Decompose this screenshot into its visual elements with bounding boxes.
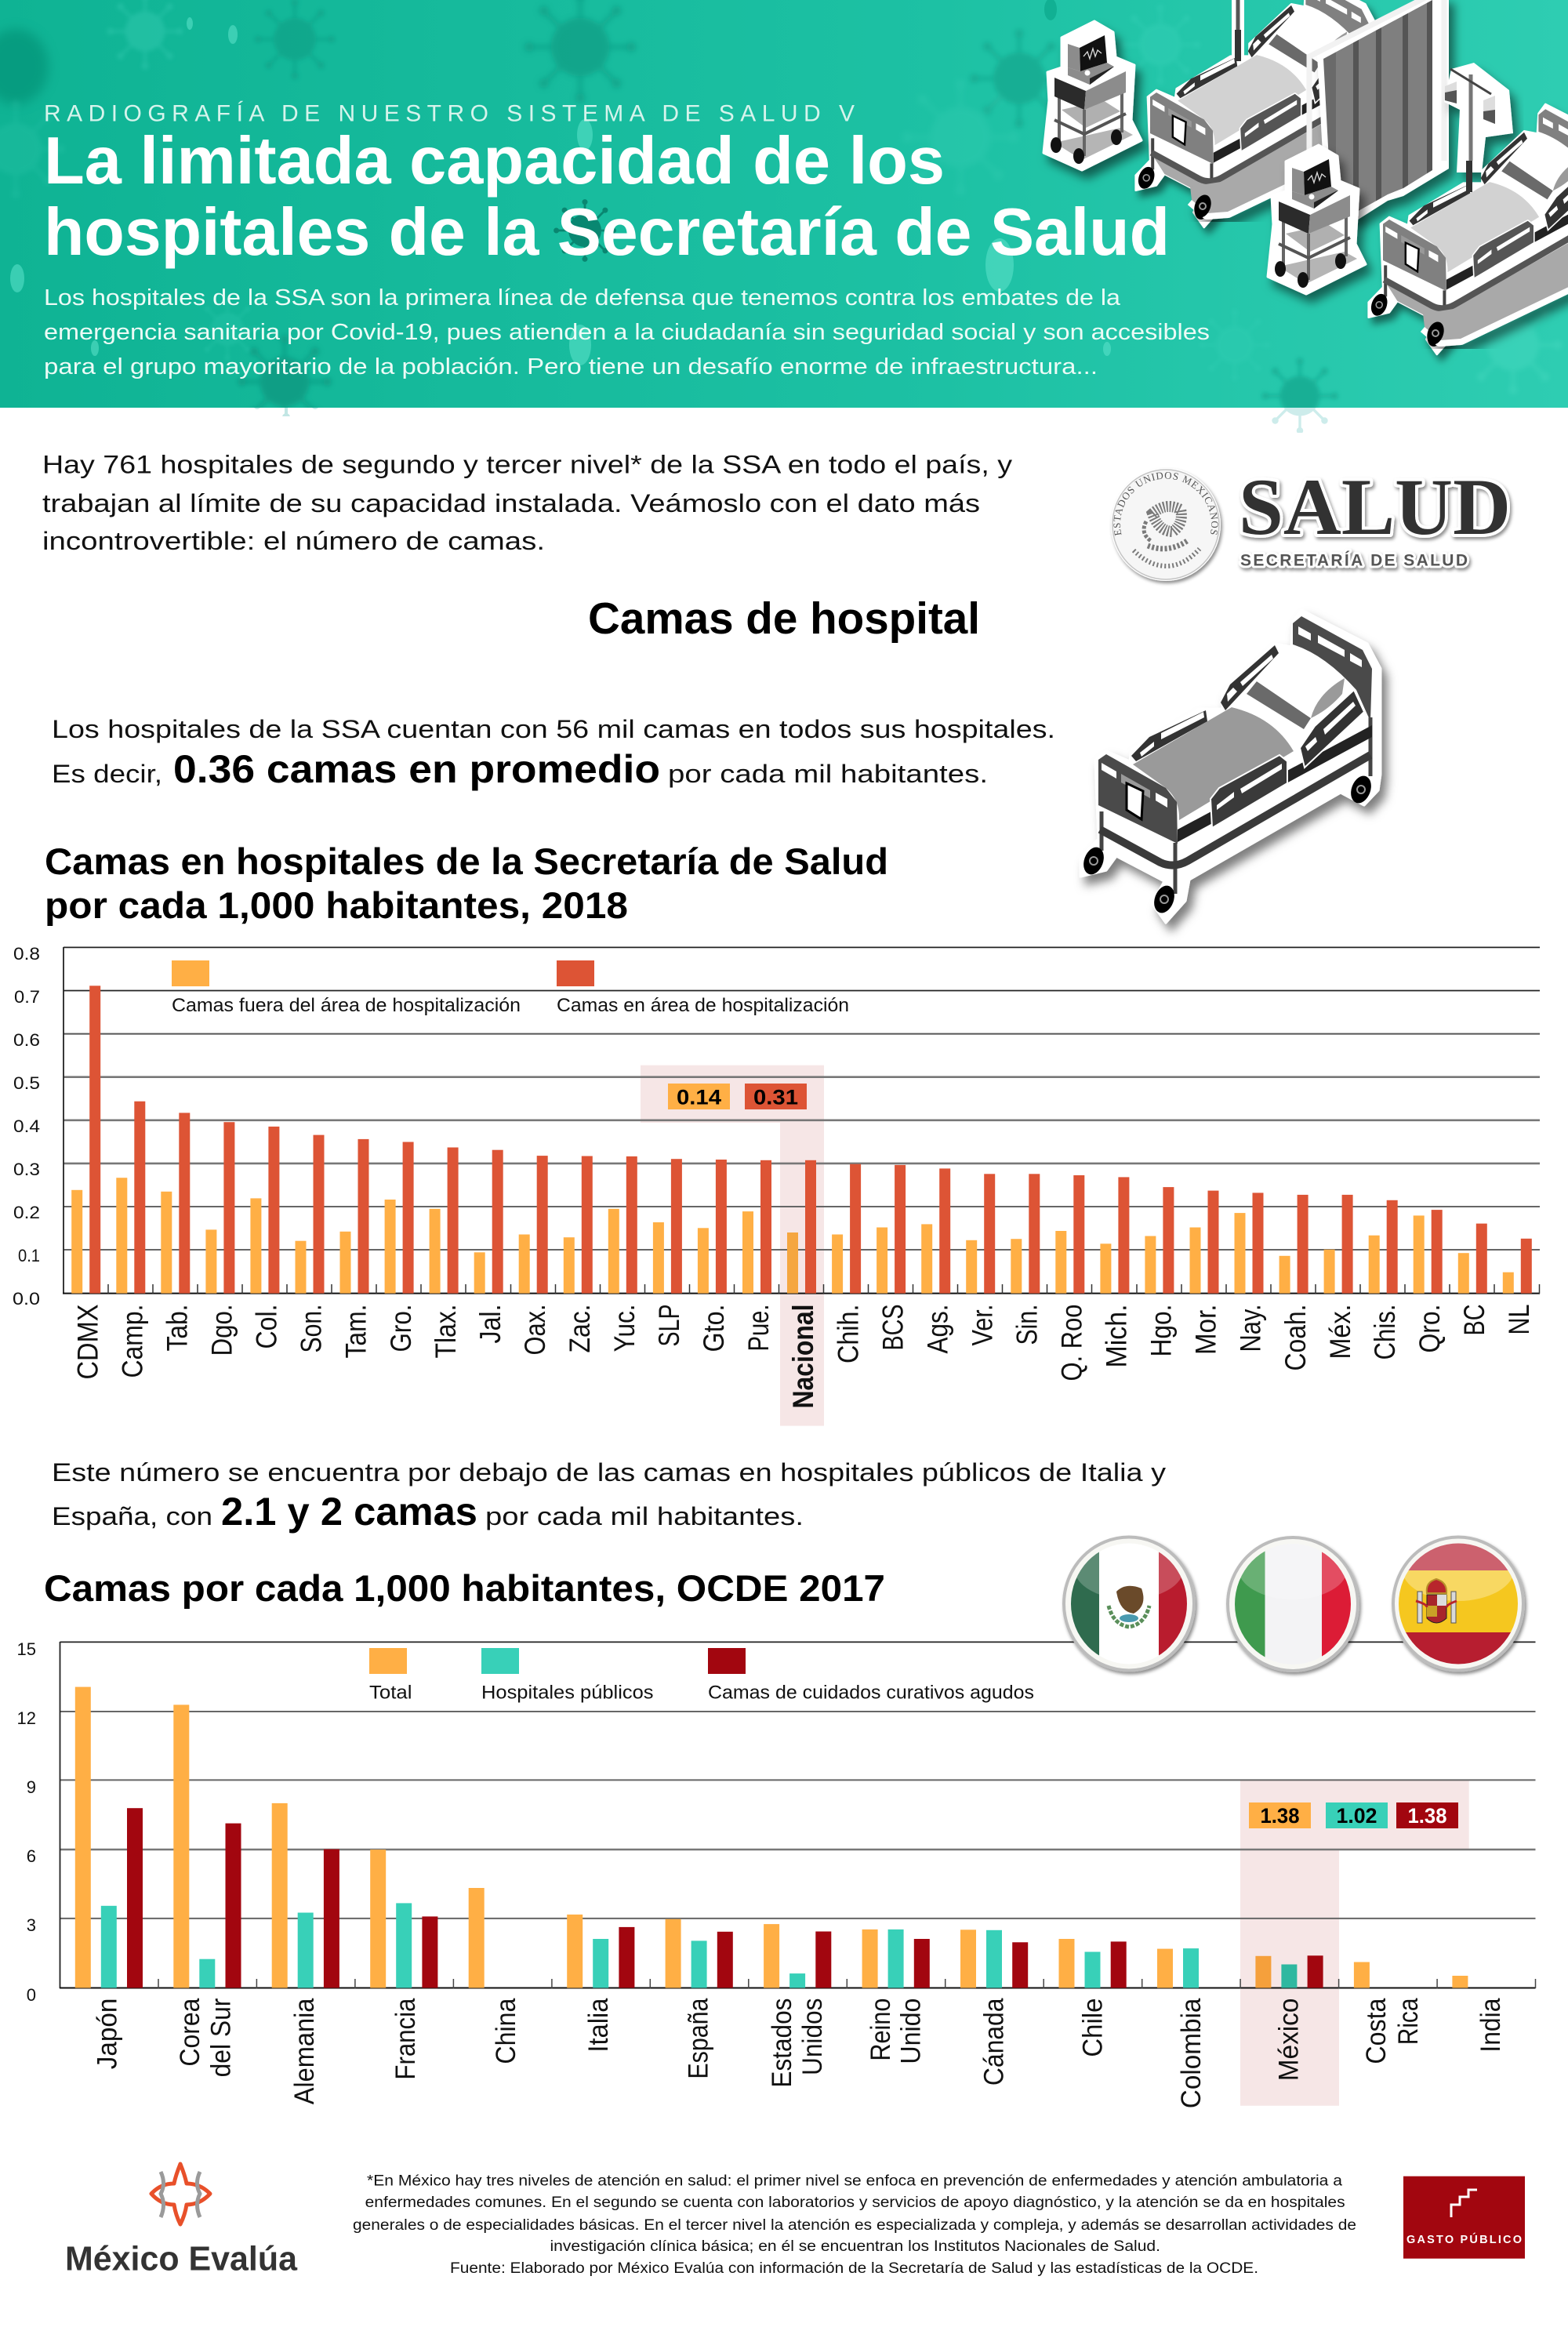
country labels: Corea <box>175 1998 205 2067</box>
Secretaría de Salud wordmark: SECRETARÍA DE SALUD <box>1240 552 1468 569</box>
country labels: Costa <box>1361 1998 1392 2064</box>
state labels: BC <box>1458 1305 1490 1336</box>
bars: camas fuera del área de hospitalización <box>71 1178 1514 1294</box>
chart 2 title: Camas por cada 1,000 habitantes, OCDE 2017 <box>44 1567 885 1609</box>
y axis labels: 0.5 <box>13 1073 40 1093</box>
country labels: Estados <box>767 1998 797 2088</box>
logo wordmark: México Evalúa <box>65 2240 298 2278</box>
icon: hospital bed <box>1080 610 1381 923</box>
y axis labels: 0.2 <box>13 1203 40 1222</box>
national seal: ESTADOS UNIDOS MEXICANOS <box>1113 472 1218 536</box>
state labels: Camp. <box>116 1305 149 1378</box>
first bed <box>1135 0 1376 227</box>
state labels: Tlax. <box>430 1305 462 1358</box>
badges: Nacional values <box>668 1084 807 1109</box>
chart 1 title <box>45 840 888 926</box>
flag: Italia <box>1228 1537 1361 1671</box>
bar chart: OCDE <box>17 1639 1535 2108</box>
legend: Camas fuera del área de hospitalización <box>172 995 521 1016</box>
state labels: Coah. <box>1279 1305 1312 1370</box>
state labels: Méx. <box>1324 1305 1356 1360</box>
flag: España <box>1393 1535 1523 1672</box>
state labels: Col. <box>251 1305 283 1349</box>
badges: Nacional values: 0.14 <box>677 1085 721 1109</box>
logo mark <box>151 2164 210 2224</box>
comparison paragraph: Este número se encuentra por debajo de las camas en hospitales públicos de Italia y <box>52 1458 1166 1487</box>
badges: Nacional values: 0.31 <box>753 1085 798 1109</box>
intro paragraph: incontrovertible: el número de camas. <box>42 527 545 555</box>
state labels: Sin. <box>1011 1305 1043 1345</box>
state labels: Yuc. <box>608 1305 641 1352</box>
y axis labels <box>13 944 40 1309</box>
IV stand with bags <box>1444 63 1513 172</box>
flag: México <box>1064 1537 1198 1670</box>
chart 1 title: Camas en hospitales de la Secretaría de Salud <box>45 840 888 882</box>
bars: camas de cuidados curativos agudos <box>127 1808 1323 1988</box>
state labels: Hgo. <box>1145 1305 1178 1356</box>
state labels: Zac. <box>564 1305 596 1353</box>
country labels: Francia <box>390 1998 421 2080</box>
logo: Secretaría de Salud <box>1110 463 1514 586</box>
state labels: Chis. <box>1369 1305 1401 1360</box>
state labels: Q. Roo <box>1055 1305 1088 1381</box>
header paragraph <box>44 285 1210 379</box>
y axis labels <box>17 1639 36 2005</box>
state labels: CDMX <box>71 1305 103 1380</box>
state labels: Chih. <box>832 1305 864 1363</box>
callout: 56 mil camas: Es decir, <box>52 760 162 788</box>
bars: camas en área de hospitalización <box>89 986 1532 1294</box>
state labels: NL <box>1503 1305 1535 1334</box>
state labels: Qro. <box>1414 1305 1446 1353</box>
country labels: Italia <box>583 1998 614 2053</box>
state labels: Jal. <box>474 1305 506 1344</box>
state labels: Gto. <box>698 1305 730 1352</box>
IV pole behind first bed <box>1232 0 1244 60</box>
y axis labels: 3 <box>27 1915 36 1935</box>
country labels: Unido <box>895 1998 927 2064</box>
bars: hospitales públicos <box>101 1903 1297 1988</box>
state labels: Nay. <box>1235 1305 1267 1352</box>
country labels <box>93 1998 1506 2108</box>
state labels: Son. <box>296 1305 328 1353</box>
state labels: Pue. <box>742 1305 775 1351</box>
monitor cart centre <box>1268 145 1366 294</box>
footnote and source: enfermedades comunes. En el segundo se cuenta con laboratorios y servicios de apoyo diagnóstico, y la atención se da en hospitales <box>365 2194 1345 2211</box>
bars: total <box>75 1687 1468 1988</box>
state labels: Nacional <box>787 1305 819 1408</box>
national seal <box>1110 469 1225 586</box>
legend: Total <box>369 1683 412 1704</box>
legend <box>369 1648 1034 1704</box>
state labels: SLP <box>653 1305 685 1347</box>
virus remnants below header <box>241 332 1338 434</box>
header text <box>44 100 1210 379</box>
section heading: Camas de hospital <box>588 594 980 644</box>
state labels: Tam. <box>340 1305 372 1358</box>
decorative virus background <box>0 0 1563 434</box>
country labels: México <box>1274 1998 1305 2081</box>
header panel <box>0 0 1568 434</box>
y axis labels: 15 <box>17 1639 36 1659</box>
y axis labels: 0.3 <box>13 1160 40 1179</box>
badges: México values: 1.02 <box>1336 1804 1377 1828</box>
badges: México values: 1.38 <box>1261 1804 1300 1828</box>
highlight band: México <box>1240 1780 1469 2106</box>
y axis labels: 0.1 <box>18 1246 40 1265</box>
legend: Camas en área de hospitalización <box>557 995 849 1016</box>
comparison paragraph <box>52 1458 1166 1534</box>
legend <box>172 960 849 1016</box>
kicker: RADIOGRAFÍA DE NUESTRO SISTEMA DE SALUD V <box>44 100 855 127</box>
badges: México values: 1.38 <box>1408 1804 1447 1828</box>
intro paragraph <box>42 450 1012 555</box>
y axis labels: 0 <box>27 1985 36 2005</box>
country labels: Alemania <box>289 1998 320 2104</box>
main title <box>44 124 1170 270</box>
monitor cart left <box>1044 21 1142 170</box>
intro paragraph: trabajan al límite de su capacidad instalada. Veámoslo con el dato más <box>42 489 980 517</box>
country labels: Colombia <box>1176 1998 1207 2108</box>
Spanish coat of arms <box>1416 1579 1457 1623</box>
footnote and source: investigación clínica básica; en él se encuentran los Institutos Nacionales de Salud. <box>550 2238 1160 2255</box>
callout: 56 mil camas: Los hospitales de la SSA cuentan con 56 mil camas en todos sus hospitales. <box>52 715 1055 743</box>
callout: 56 mil camas: 0.36 camas en promedio <box>173 747 660 791</box>
y axis labels: 6 <box>27 1846 36 1866</box>
country labels: Unidos <box>797 1998 828 2075</box>
state labels: Tab. <box>162 1305 193 1352</box>
country labels: del Sur <box>205 1998 236 2077</box>
Mexican coat of arms <box>1109 1586 1149 1627</box>
state labels: BCS <box>877 1305 909 1350</box>
y axis labels: 9 <box>27 1777 36 1797</box>
country labels: Cánada <box>978 1998 1009 2086</box>
state labels: Ags. <box>921 1305 953 1354</box>
callout: 56 mil camas <box>52 715 1055 791</box>
logo: Gasto Público: GASTO PÚBLICO <box>1406 2232 1522 2246</box>
state labels: Mich. <box>1101 1305 1133 1367</box>
footer logo: México Evalúa <box>65 2164 298 2278</box>
y axis labels: 0.4 <box>13 1116 40 1136</box>
curtain <box>1309 0 1449 235</box>
header paragraph: para el grupo mayoritario de la población. Pero tiene un desafío enorme de infraestructura... <box>44 354 1098 379</box>
footnote and source: generales o de especialidades básicas. En el tercer nivel la atención es especializada y compleja, y además se desarrollan actividades de <box>353 2216 1356 2234</box>
footnote and source: *En México hay tres niveles de atención en salud: el primer nivel se enfoca en prevención de enfermedades y atención ambulatoria a <box>367 2173 1342 2190</box>
state labels <box>71 1305 1535 1408</box>
main title: hospitales de la Secretaría de Salud <box>44 195 1170 270</box>
badges: México values <box>1249 1802 1458 1828</box>
header paragraph: emergencia sanitaria por Covid-19, pues atienden a la ciudadanía sin seguridad social y son accesibles <box>44 320 1210 345</box>
country labels: Japón <box>93 1998 123 2069</box>
country labels: España <box>683 1998 713 2079</box>
comparison paragraph: España, con <box>52 1502 212 1530</box>
state labels: Dgo. <box>206 1305 238 1356</box>
country labels: China <box>491 1998 521 2064</box>
y axis labels: 0.8 <box>13 944 40 964</box>
legend: Hospitales públicos <box>481 1683 654 1704</box>
state labels: Gro. <box>385 1305 417 1352</box>
legend: Camas de cuidados curativos agudos <box>708 1683 1034 1704</box>
state labels: Ver. <box>966 1305 998 1345</box>
main title: La limitada capacidad de los <box>44 124 945 198</box>
footnote and source: Fuente: Elaborado por México Evalúa con información de la Secretaría de Salud y las estadísticas de la OCDE. <box>450 2260 1258 2277</box>
bar chart: camas por estado <box>13 944 1540 1426</box>
comparison paragraph: 2.1 y 2 camas <box>221 1490 477 1534</box>
country labels: Rica <box>1393 1998 1424 2045</box>
intro paragraph: Hay 761 hospitales de segundo y tercer nivel* de la SSA en todo el país, y <box>42 450 1012 478</box>
comparison paragraph: por cada mil habitantes. <box>485 1502 804 1530</box>
chart 1 title: por cada 1,000 habitantes, 2018 <box>45 884 628 926</box>
footnote and source <box>353 2173 1356 2277</box>
highlight band: Nacional <box>641 1065 824 1426</box>
y axis labels: 0.6 <box>13 1030 40 1050</box>
header illustration: hospital beds, curtain and monitors <box>1044 0 1568 354</box>
logo: Gasto Público <box>1403 2176 1525 2259</box>
state labels: Oax. <box>519 1305 551 1355</box>
country labels: Reino <box>866 1998 896 2061</box>
country labels: Chile <box>1078 1998 1109 2057</box>
SALUD wordmark: SALUD <box>1239 463 1511 552</box>
second bed <box>1368 104 1568 354</box>
callout: 56 mil camas: por cada mil habitantes. <box>668 760 988 788</box>
y axis labels: 0.0 <box>13 1289 40 1309</box>
state labels: Mor. <box>1190 1305 1222 1355</box>
country labels: India <box>1475 1998 1506 2053</box>
y axis labels: 0.7 <box>14 987 40 1007</box>
y axis labels: 12 <box>17 1708 36 1728</box>
header paragraph: Los hospitales de la SSA son la primera línea de defensa que tenemos contra los embates de la <box>44 285 1121 310</box>
